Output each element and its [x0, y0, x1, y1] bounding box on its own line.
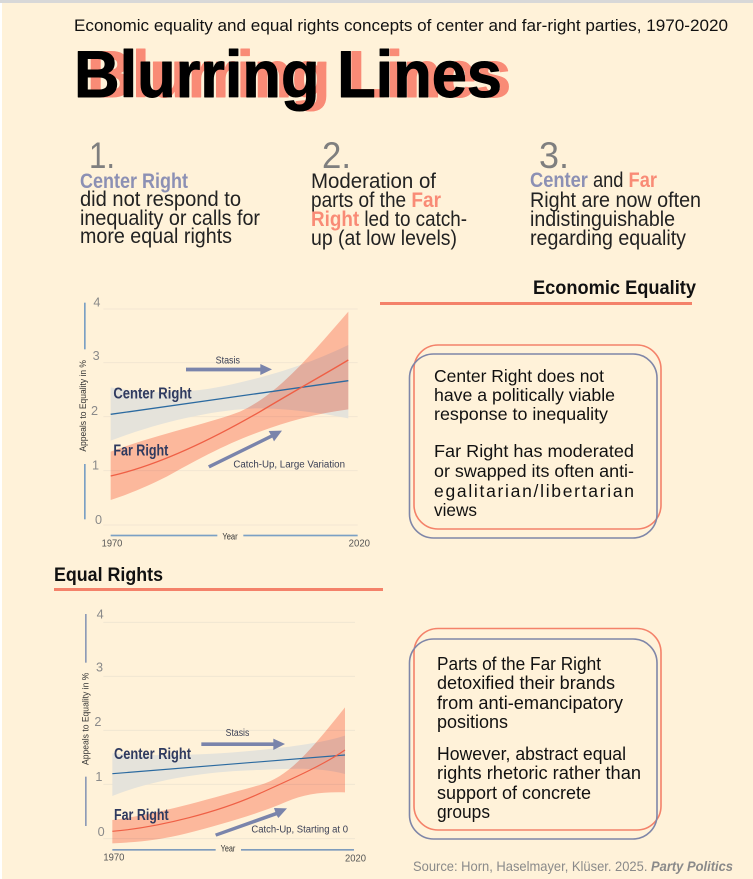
heading: equal rights: Equal Rights [54, 564, 163, 586]
title: Blurring Lines [74, 37, 502, 111]
text box: economic equality: egalitarian/libertarian [434, 481, 634, 501]
y axis [78, 296, 102, 527]
y axis: 4 [93, 296, 100, 310]
x axis [102, 531, 370, 550]
takeaway 2: 2. [322, 135, 351, 176]
arrow: stasis [186, 355, 272, 375]
y axis: 0 [95, 513, 102, 527]
text box: equal rights: rights rhetoric rather than [437, 763, 641, 783]
chart: equal rights [81, 607, 366, 865]
title: Blurring Lines [87, 37, 511, 111]
y axis: 1 [95, 770, 102, 784]
label: center right: Center Right [113, 385, 192, 402]
text box: equal rights: support of concrete [437, 783, 591, 803]
y axis: 4 [97, 607, 104, 621]
y axis [81, 607, 105, 839]
center right line [111, 381, 348, 414]
takeaway 1: did not respond to [80, 188, 241, 211]
takeaway 2: Moderation of [311, 170, 436, 193]
y axis: 2 [91, 404, 98, 418]
arrow: catch-up: Catch-Up, Large Variation [233, 459, 345, 470]
text box: equal rights: detoxified their brands [437, 673, 615, 693]
x axis: 2020 [345, 854, 366, 865]
x axis: 2020 [349, 539, 370, 550]
text box: economic equality [410, 345, 661, 538]
text box: economic equality: have a politically viable [434, 385, 615, 405]
x axis: Year [221, 844, 235, 854]
label: far right: Far Right [114, 807, 169, 824]
text box: economic equality: or swapped its often anti- [434, 461, 634, 481]
y axis: 3 [96, 661, 103, 675]
heading: economic equality: Economic Equality [533, 277, 696, 299]
text box: equal rights [410, 628, 661, 839]
center right line [112, 755, 345, 774]
text box: equal rights: from anti-emancipatory [437, 693, 623, 713]
arrow: catch-up [208, 431, 345, 470]
arrow: stasis: Stasis [216, 355, 240, 366]
chart: economic equality [78, 296, 370, 550]
takeaway 3: 3. [539, 135, 569, 176]
far right line [111, 360, 348, 476]
takeaway 1: more equal rights [80, 225, 232, 248]
y axis: 0 [98, 825, 105, 839]
takeaway 3 [530, 135, 701, 250]
takeaway 3: Center and Far [530, 169, 657, 192]
text box: equal rights: groups [437, 802, 490, 822]
y axis: 3 [93, 349, 100, 363]
x axis: 1970 [103, 853, 125, 864]
subtitle: Economic equality and equal rights concepts of center and far-right parties, 1970-2020 [74, 17, 728, 35]
takeaway 2: up (at low levels) [311, 227, 457, 250]
takeaway 3: indistinguishable [530, 208, 675, 231]
center right confidence band [111, 345, 348, 441]
text box: economic equality: views [434, 500, 477, 520]
source note: Source: Horn, Haselmayer, Klüser. 2025. Party Politics [413, 859, 733, 874]
far right confidence band [112, 707, 345, 843]
x axis: Year [222, 531, 238, 541]
arrow: catch-up: Catch-Up, Starting at 0 [251, 824, 348, 835]
y axis: Appeals to Equality in % [78, 360, 88, 452]
takeaway 1: inequality or calls for [80, 207, 260, 230]
label: far right: Far Right [113, 443, 168, 460]
x axis [103, 844, 366, 865]
text box: economic equality: Far Right has moderated [434, 441, 634, 461]
arrow: stasis [201, 728, 285, 750]
far right confidence band [111, 312, 348, 500]
arrow: stasis: Stasis [226, 728, 249, 739]
far right line [112, 750, 345, 831]
label: center right: Center Right [114, 746, 191, 763]
text box: equal rights: positions [437, 712, 508, 732]
y axis: Appeals to Equality in % [81, 673, 91, 765]
text box: economic equality: Center Right does not [434, 366, 604, 386]
takeaway 1 [80, 135, 260, 248]
takeaway 1: 1. [89, 135, 115, 176]
y axis: 2 [94, 715, 101, 729]
takeaway 2: parts of the Far [311, 189, 441, 212]
takeaway 3: regarding equality [530, 227, 686, 250]
arrow: catch-up [215, 808, 348, 837]
y axis: 1 [92, 458, 99, 472]
takeaway 3: Right are now often [530, 189, 701, 212]
text box: equal rights: Parts of the Far Right [437, 654, 601, 674]
takeaway 2: Right led to catch- [311, 208, 467, 231]
center right confidence band [112, 736, 345, 796]
text box: economic equality: response to inequality [434, 404, 608, 424]
text box: equal rights: However, abstract equal [437, 744, 626, 764]
takeaway 1: Center Right [80, 170, 188, 193]
takeaway 2 [311, 135, 467, 250]
x axis: 1970 [102, 539, 123, 550]
